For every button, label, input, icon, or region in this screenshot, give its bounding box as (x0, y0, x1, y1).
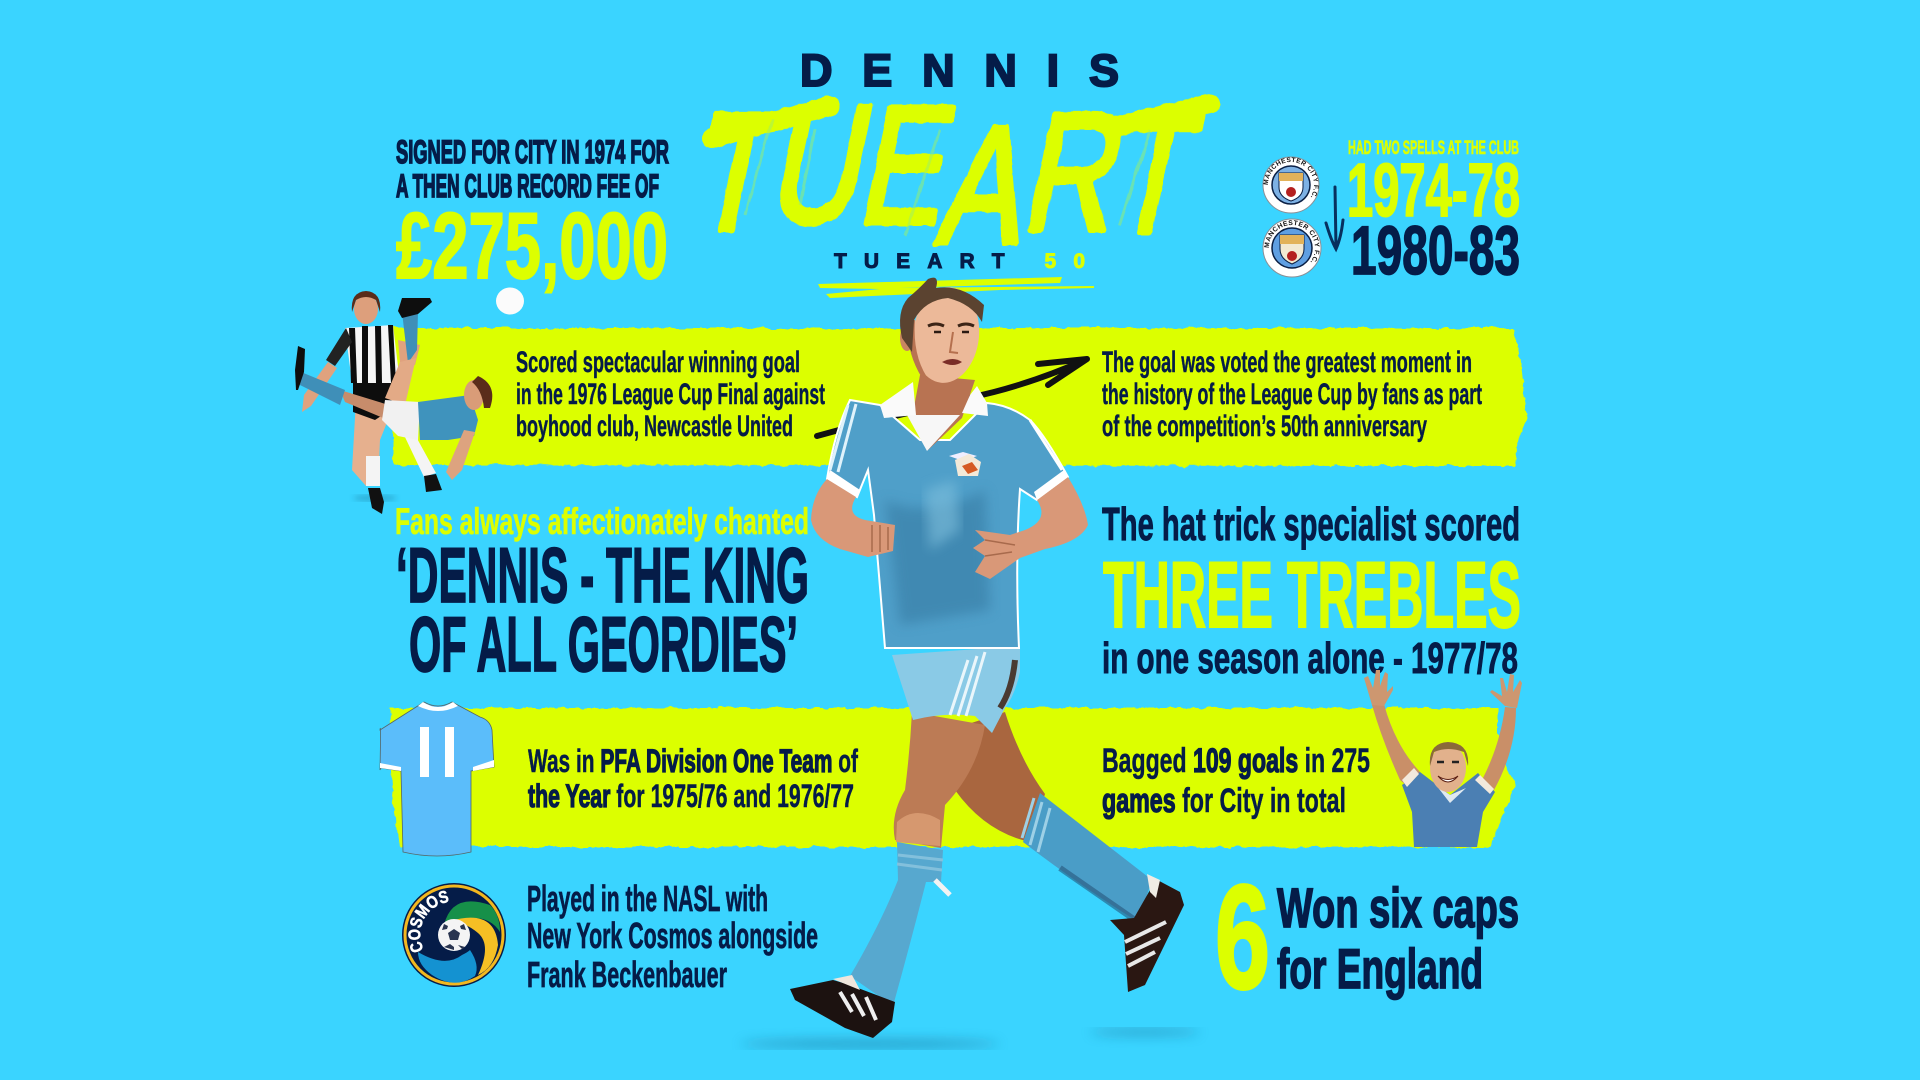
collar (880, 382, 988, 418)
icon: Manchester City badge 1: MANCHESTER CITY F.C. (1263, 157, 1319, 198)
left arm (811, 479, 895, 557)
text block: three trebles (1102, 498, 1521, 683)
shirt crest (955, 454, 981, 476)
arrow: between spells (1326, 187, 1343, 249)
undershirt (907, 415, 960, 451)
text block: NASL: New York Cosmos alongside (527, 915, 818, 956)
back boot (1110, 875, 1184, 992)
player cutout: Dennis Tueart running (790, 278, 1184, 1038)
text block: signed for City: SIGNED FOR CITY IN 1974 FOR (396, 134, 669, 170)
front boot (790, 980, 895, 1038)
text block: six caps: 6 (1215, 855, 1270, 1020)
back leg (950, 712, 1045, 842)
text block: NASL: Frank Beckenbauer (527, 954, 727, 995)
hair (900, 278, 984, 352)
text block: goals total (1102, 742, 1370, 820)
text block: six caps: Won six caps (1277, 876, 1519, 939)
text block: PFA team of the year (528, 743, 858, 814)
text block: two spells at the club: 1980-83 (1351, 212, 1520, 289)
text block: greatest moment (1102, 346, 1482, 443)
text block: greatest moment: of the competition’s 50th anniversary (1102, 410, 1427, 443)
neck (912, 375, 975, 450)
Newcastle player (302, 291, 442, 514)
eyes and mouth (928, 324, 974, 326)
front sock (850, 842, 943, 1006)
text block: two spells at the club: 1974-78 (1347, 148, 1520, 232)
text block: greatest moment: The goal was voted the greatest moment in (1102, 346, 1472, 379)
text block: goals total: Bagged 109 goals in 275 (1102, 742, 1370, 780)
text block: signed for City: £275,000 (396, 193, 668, 298)
umbro logo (949, 452, 977, 461)
head (908, 284, 984, 386)
text block: fans chant: Fans always affectionately chanted (395, 501, 809, 542)
arrow: goal to greatest moment (817, 359, 1087, 436)
text block: winning goal: in the 1976 League Cup Final against (516, 378, 825, 411)
back sock (1023, 793, 1152, 922)
text block: signed for City: A THEN CLUB RECORD FEE OF (396, 168, 659, 204)
text block: NASL (527, 878, 818, 995)
icon: number 11 shirt (380, 702, 494, 856)
shirt (827, 400, 1068, 648)
icon: Cosmos club badge (402, 883, 506, 987)
text block: PFA team of the year: Was in PFA Division One Team of (528, 743, 858, 779)
icon: Cosmos club badge: COSMOS (408, 890, 448, 952)
ear (900, 325, 914, 351)
text block: two spells at the club: HAD TWO SPELLS AT THE CLUB (1348, 138, 1519, 159)
text block: fans chant: OF ALL GEORDIES’ (409, 600, 798, 688)
text block: winning goal (516, 346, 825, 443)
sleeve cuffs (827, 470, 1068, 500)
photo illustration: celebrating Tueart (1364, 670, 1522, 847)
shorts (892, 646, 1020, 733)
subtitle brush underline (818, 277, 1094, 298)
City player (295, 298, 492, 480)
title: Tueart brush lettering: TUEART (678, 70, 1217, 279)
text block: winning goal: Scored spectacular winning goal (516, 346, 800, 379)
subtitle: Tueart 50: TUEART 50 (834, 250, 1085, 273)
icon: Manchester City badge 2: MANCHESTER CITY F.C. (1264, 220, 1320, 262)
text block: two spells at the club (1347, 138, 1520, 289)
yellow brush band: top (392, 328, 1527, 466)
title: Dennis: DENNIS (800, 45, 1119, 96)
text block: PFA team of the year: the Year for 1975/76 and 1976/77 (528, 778, 854, 814)
front thigh (894, 712, 985, 848)
text block: three trebles: THREE TREBLES (1103, 542, 1521, 647)
text block: fans chant: ‘DENNIS - THE KING (396, 531, 809, 619)
text block: three trebles: in one season alone - 1977/78 (1102, 634, 1518, 683)
text block: goals total: games for City in total (1102, 782, 1346, 820)
text block: winning goal: boyhood club, Newcastle United (516, 410, 793, 443)
text block: NASL: Played in the NASL with (527, 878, 768, 919)
ground shadow (740, 1029, 1200, 1048)
photo illustration: bicycle kick (295, 291, 492, 514)
right arm (973, 477, 1088, 579)
text block: three trebles: The hat trick specialist scored (1102, 498, 1520, 550)
text block: fans chant (395, 501, 809, 688)
yellow brush band: lower (390, 708, 1516, 847)
text block: greatest moment: the history of the League Cup by fans as part (1102, 378, 1482, 411)
text block: six caps: for England (1277, 937, 1483, 1000)
text block: six caps (1215, 855, 1519, 1020)
text block: signed for City (396, 134, 669, 298)
icon: football in flight (496, 288, 524, 314)
